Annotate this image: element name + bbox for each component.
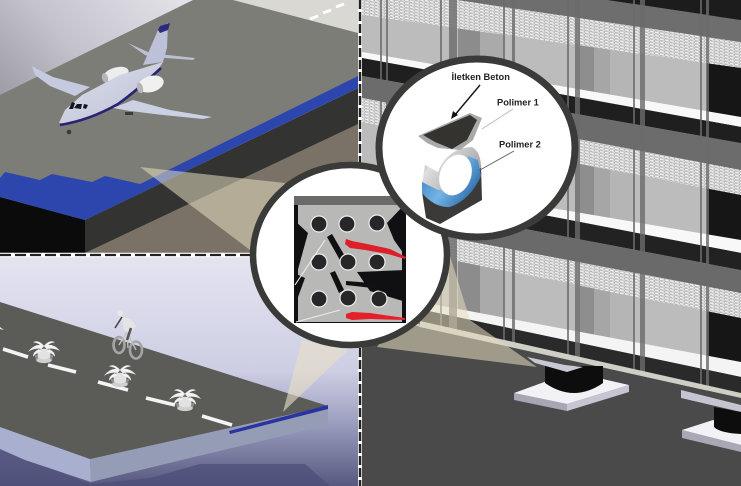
planter [28, 341, 60, 363]
callout: polymer ring diagram [379, 59, 575, 237]
polymer 2 ring [422, 156, 481, 207]
dashed divider horizontal [0, 253, 360, 257]
horizontal stabiliser [128, 43, 195, 60]
top piece rim [418, 113, 482, 150]
top piece conductive concrete [423, 115, 477, 149]
dashed divider vertical [358, 0, 362, 486]
leader: Polimer 1 [482, 109, 513, 129]
top panel band [362, 0, 741, 42]
panel: airport runway [0, 0, 360, 255]
planter [169, 389, 201, 411]
floor slab 1 [362, 52, 741, 127]
lower block [422, 165, 482, 224]
spandrel grey 1 [362, 76, 741, 170]
label: Polimer 1: Polimer 1 [497, 98, 539, 108]
polymer grey ring face [422, 147, 481, 192]
road right face [90, 406, 328, 482]
planter [104, 365, 136, 387]
projection beam to sample [377, 256, 537, 367]
panel: building [362, 0, 741, 486]
projection beam to sample [140, 167, 285, 250]
spandrel dark 3 [362, 297, 741, 393]
mesh facade band 2 [362, 98, 741, 195]
spandrel dark 2 [362, 180, 741, 270]
runway dark right face [85, 88, 358, 253]
conductive blue layer [0, 76, 358, 220]
road left face [0, 427, 91, 482]
arrow: İletken Beton [451, 85, 480, 119]
seismic isolator 1 [514, 357, 629, 411]
ground below runway [0, 120, 360, 255]
fuselage [59, 62, 163, 124]
ring hole [433, 150, 478, 200]
circle frame [253, 165, 447, 345]
mesh facade band 3 [362, 221, 741, 318]
blue conductive strip [229, 405, 328, 434]
red clip upper [345, 239, 406, 259]
far road section [225, 0, 360, 34]
seismic isolator 2 [681, 390, 741, 452]
near engine [136, 73, 166, 95]
black clip [346, 281, 405, 300]
fuselage stripe [60, 68, 161, 125]
airplane [32, 23, 212, 134]
runway surface [0, 0, 358, 184]
road surface [0, 302, 328, 459]
planter at edge [0, 327, 4, 330]
near wing [113, 100, 212, 119]
far engine [101, 64, 130, 84]
slab edge fringe [420, 321, 741, 398]
callout: conductive concrete photo [253, 165, 447, 345]
white wires [295, 240, 340, 322]
panel: bicycle road [0, 257, 360, 486]
circle frame [379, 59, 575, 237]
cockpit windows [69, 102, 88, 109]
floor slab 2 [362, 176, 741, 253]
tail fin [143, 23, 168, 65]
concrete blocks [298, 205, 402, 322]
spandrel grey 2 [362, 198, 741, 293]
leader: Polimer 2 [480, 151, 514, 170]
floor slab 3 [362, 291, 741, 377]
vertical mullions [380, 0, 709, 390]
label: İletken Beton: İletken Beton [452, 72, 510, 82]
left wing [32, 66, 90, 96]
ground shadow [0, 448, 330, 486]
black gaps [294, 203, 406, 302]
projection beam to sample [283, 340, 348, 412]
cyclist [114, 310, 142, 358]
spandrel dark 1 [362, 58, 741, 143]
ring specimen [418, 113, 482, 224]
lane markings [3, 349, 232, 425]
ground plane [362, 304, 741, 486]
red clip lower [346, 312, 405, 320]
label: Polimer 2: Polimer 2 [499, 140, 541, 150]
runway dark left face [0, 197, 85, 253]
glass panes [458, 0, 741, 400]
landing gear [67, 112, 133, 134]
mesh facade band 1 [362, 0, 741, 68]
drilled holes [311, 215, 387, 307]
sample photo [294, 196, 406, 323]
